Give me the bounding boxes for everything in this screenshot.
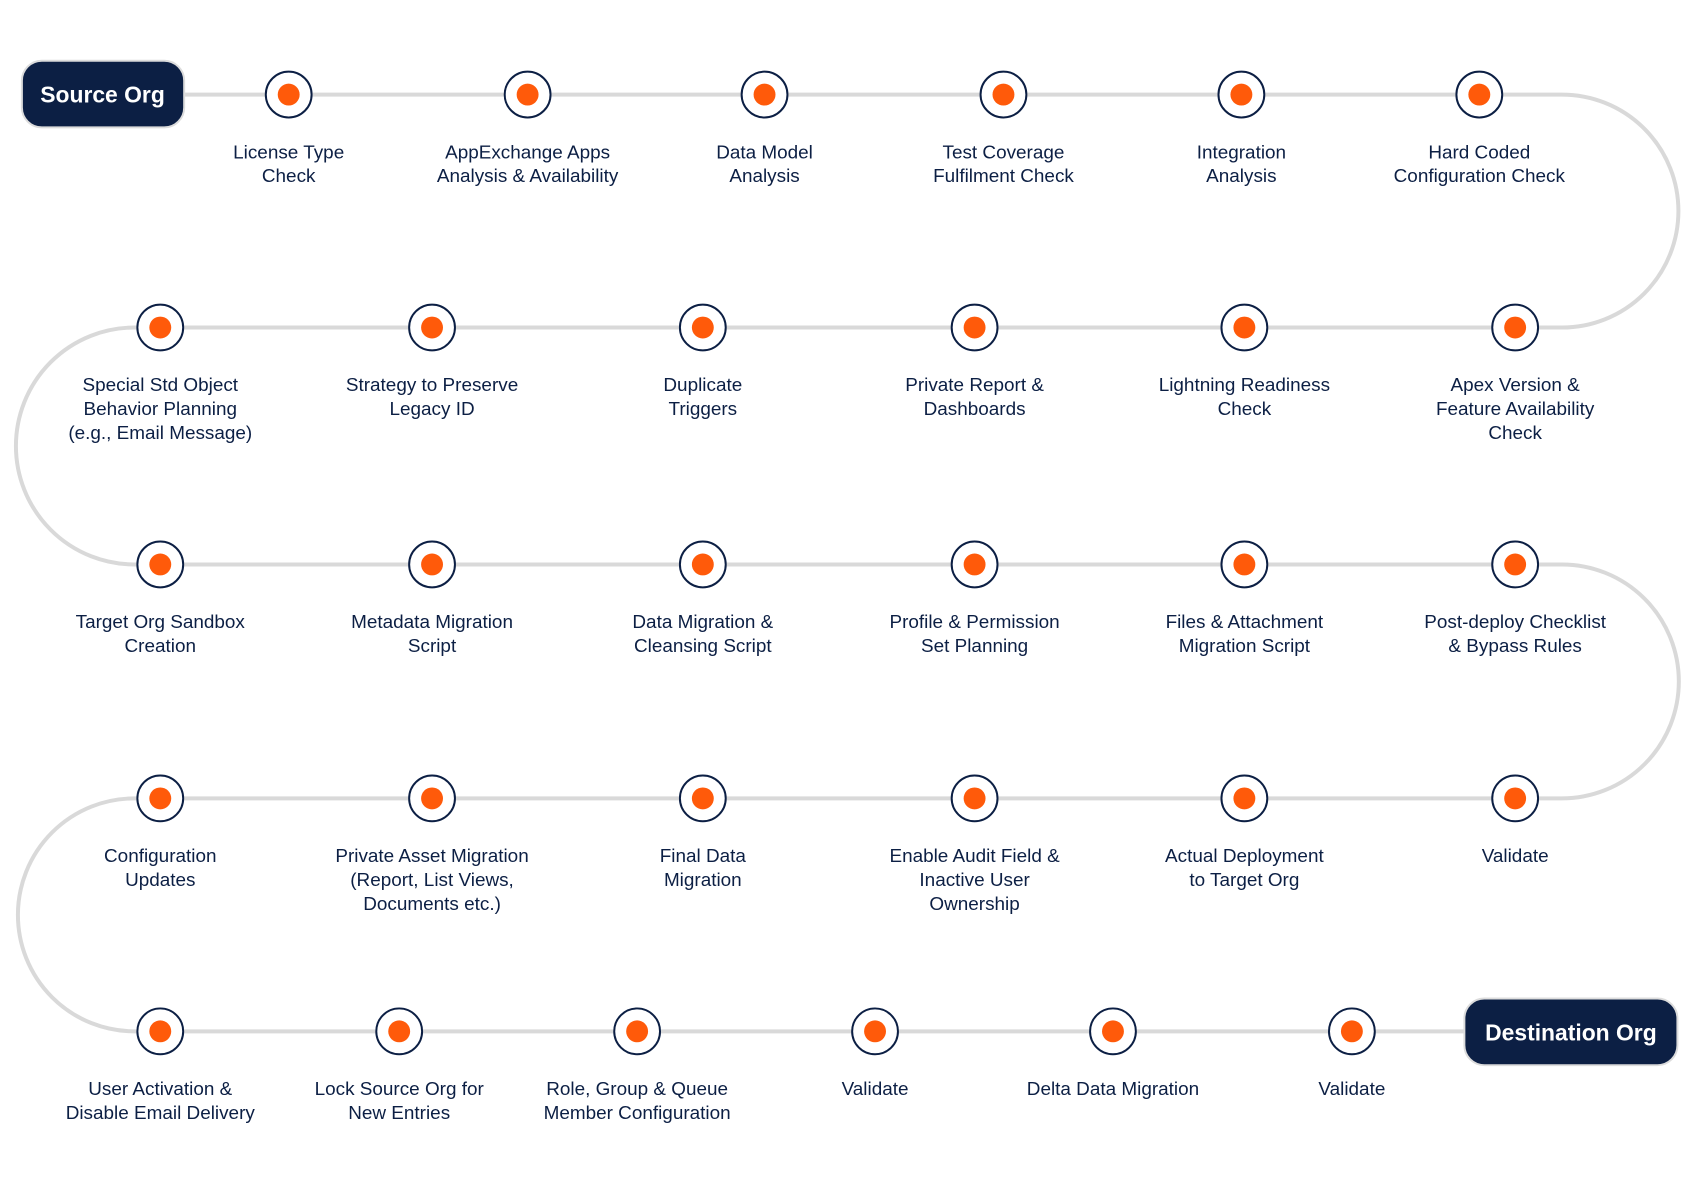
step: Delta Data Migration: Delta Data Migration	[1027, 1079, 1199, 1100]
step: Data Migration	[632, 542, 774, 657]
step: AppExchange Apps: AppExchange Apps	[445, 142, 610, 163]
step: Test Coverage: Test Coverage	[943, 142, 1064, 163]
step: Integration Analysis: Integration	[1197, 142, 1286, 163]
step: Private Asset Migration: Documents etc.)	[363, 894, 501, 915]
step: Files Attachment	[1166, 542, 1324, 657]
step: Profile Permission: Profile & Permission	[889, 612, 1060, 633]
step: Hard Coded Config: Configuration Check	[1394, 166, 1566, 187]
step: User Activation: Disable Email Delivery	[66, 1103, 255, 1124]
step: Data Model Analysis: Data Model	[716, 142, 813, 163]
step: Role Group Queue	[544, 1008, 731, 1124]
step: Validate 1: Validate	[1482, 846, 1549, 867]
step: Special Std Object: Special Std Object	[83, 375, 239, 396]
step: Profile Permission	[889, 542, 1060, 657]
step: Validate 2	[842, 1008, 909, 1100]
step: Special Std Object: Behavior Planning	[84, 399, 237, 420]
step: Private Asset Migration: Private Asset Migration	[335, 846, 529, 867]
step: Data Migration: Cleansing Script	[634, 636, 772, 657]
step: Apex Version: Feature Availability	[1436, 399, 1595, 420]
step: Final Data Migration	[660, 775, 746, 891]
step: Data Migration: Data Migration &	[632, 612, 774, 633]
step: Lock Source Org: New Entries	[348, 1103, 450, 1124]
step: Integration Analysis	[1197, 72, 1286, 187]
step: Hard Coded Config	[1394, 72, 1566, 187]
step: Strategy Legacy ID	[346, 305, 518, 420]
step: AppExchange Apps	[437, 72, 619, 187]
step: Metadata Migration: Script	[408, 636, 457, 657]
step: Special Std Object: (e.g., Email Message)	[68, 423, 252, 444]
step: Integration Analysis: Analysis	[1206, 166, 1277, 187]
step: User Activation	[66, 1008, 255, 1124]
step: Target Org Sandbox	[76, 542, 245, 657]
step: Post-deploy Checklist: Post-deploy Checklist	[1424, 612, 1607, 633]
step: Actual Deployment	[1165, 775, 1324, 891]
step: Validate 3	[1318, 1008, 1385, 1100]
step: Duplicate Triggers	[663, 305, 742, 420]
step: Apex Version: Check	[1488, 423, 1542, 444]
step: Target Org Sandbox: Target Org Sandbox	[76, 612, 245, 633]
step: Metadata Migration	[351, 542, 513, 657]
step: Configuration Updates: Configuration	[104, 846, 217, 867]
step: Duplicate Triggers: Triggers	[669, 399, 737, 420]
step: Private Report	[905, 305, 1044, 420]
step: Final Data Migration: Migration	[664, 870, 742, 891]
step: Post-deploy Checklist: & Bypass Rules	[1448, 636, 1582, 657]
step: Actual Deployment: Actual Deployment	[1165, 846, 1324, 867]
step: Final Data Migration: Final Data	[660, 846, 746, 867]
step: Files Attachment: Files & Attachment	[1166, 612, 1324, 633]
step: License Type Check: Check	[262, 166, 316, 187]
step: Lightning Readiness: Lightning Readiness	[1159, 375, 1330, 396]
step: Files Attachment: Migration Script	[1179, 636, 1311, 657]
step: Data Model Analysis	[716, 72, 813, 187]
step: License Type Check	[233, 72, 344, 187]
step: Strategy Legacy ID: Legacy ID	[389, 399, 475, 420]
step: Lightning Readiness	[1159, 305, 1330, 420]
step: Validate 1	[1482, 775, 1549, 867]
step: Actual Deployment: to Target Org	[1189, 870, 1299, 891]
step: Private Report: Private Report &	[905, 375, 1044, 396]
step: AppExchange Apps: Analysis & Availability	[437, 166, 619, 187]
step: User Activation: User Activation &	[88, 1079, 233, 1100]
step: Enable Audit Field	[889, 775, 1060, 915]
step: Configuration Updates: Updates	[125, 870, 195, 891]
step: Lock Source Org	[315, 1008, 484, 1124]
step: Role Group Queue: Role, Group & Queue	[546, 1079, 728, 1100]
start box: Source Org: Source Org	[40, 82, 165, 108]
step: Lock Source Org: Lock Source Org for	[315, 1079, 484, 1100]
step: Enable Audit Field: Inactive User	[919, 870, 1030, 891]
step: Duplicate Triggers: Duplicate	[663, 375, 742, 396]
step: Lightning Readiness: Check	[1218, 399, 1272, 420]
step: Enable Audit Field: Ownership	[929, 894, 1020, 915]
step: Target Org Sandbox: Creation	[125, 636, 196, 657]
step: Apex Version: Apex Version &	[1451, 375, 1580, 396]
start box: Source Org	[22, 61, 184, 127]
step: Test Coverage	[933, 72, 1074, 187]
step: Profile Permission: Set Planning	[921, 636, 1028, 657]
step: Enable Audit Field: Enable Audit Field &	[889, 846, 1060, 867]
step: Special Std Object	[68, 305, 252, 444]
step: Validate 3: Validate	[1318, 1079, 1385, 1100]
step: Metadata Migration: Metadata Migration	[351, 612, 513, 633]
step: Private Asset Migration	[335, 775, 529, 915]
end box: Destination Org: Destination Org	[1485, 1019, 1657, 1045]
step: Private Asset Migration: (Report, List Views,	[350, 870, 514, 891]
step: Configuration Updates	[104, 775, 217, 891]
end box: Destination Org	[1464, 998, 1677, 1065]
step: Data Model Analysis: Analysis	[729, 166, 800, 187]
step: Hard Coded Config: Hard Coded	[1428, 142, 1530, 163]
step: Test Coverage: Fulfilment Check	[933, 166, 1074, 187]
step: Post-deploy Checklist	[1424, 542, 1607, 657]
step: Delta Data Migration	[1027, 1008, 1199, 1100]
step: License Type Check: License Type	[233, 142, 344, 163]
step: Private Report: Dashboards	[924, 399, 1026, 420]
step: Apex Version	[1436, 305, 1595, 444]
step: Role Group Queue: Member Configuration	[544, 1103, 731, 1124]
timeline path	[16, 95, 1679, 1031]
step: Strategy Legacy ID: Strategy to Preserve	[346, 375, 518, 396]
step: Validate 2: Validate	[842, 1079, 909, 1100]
